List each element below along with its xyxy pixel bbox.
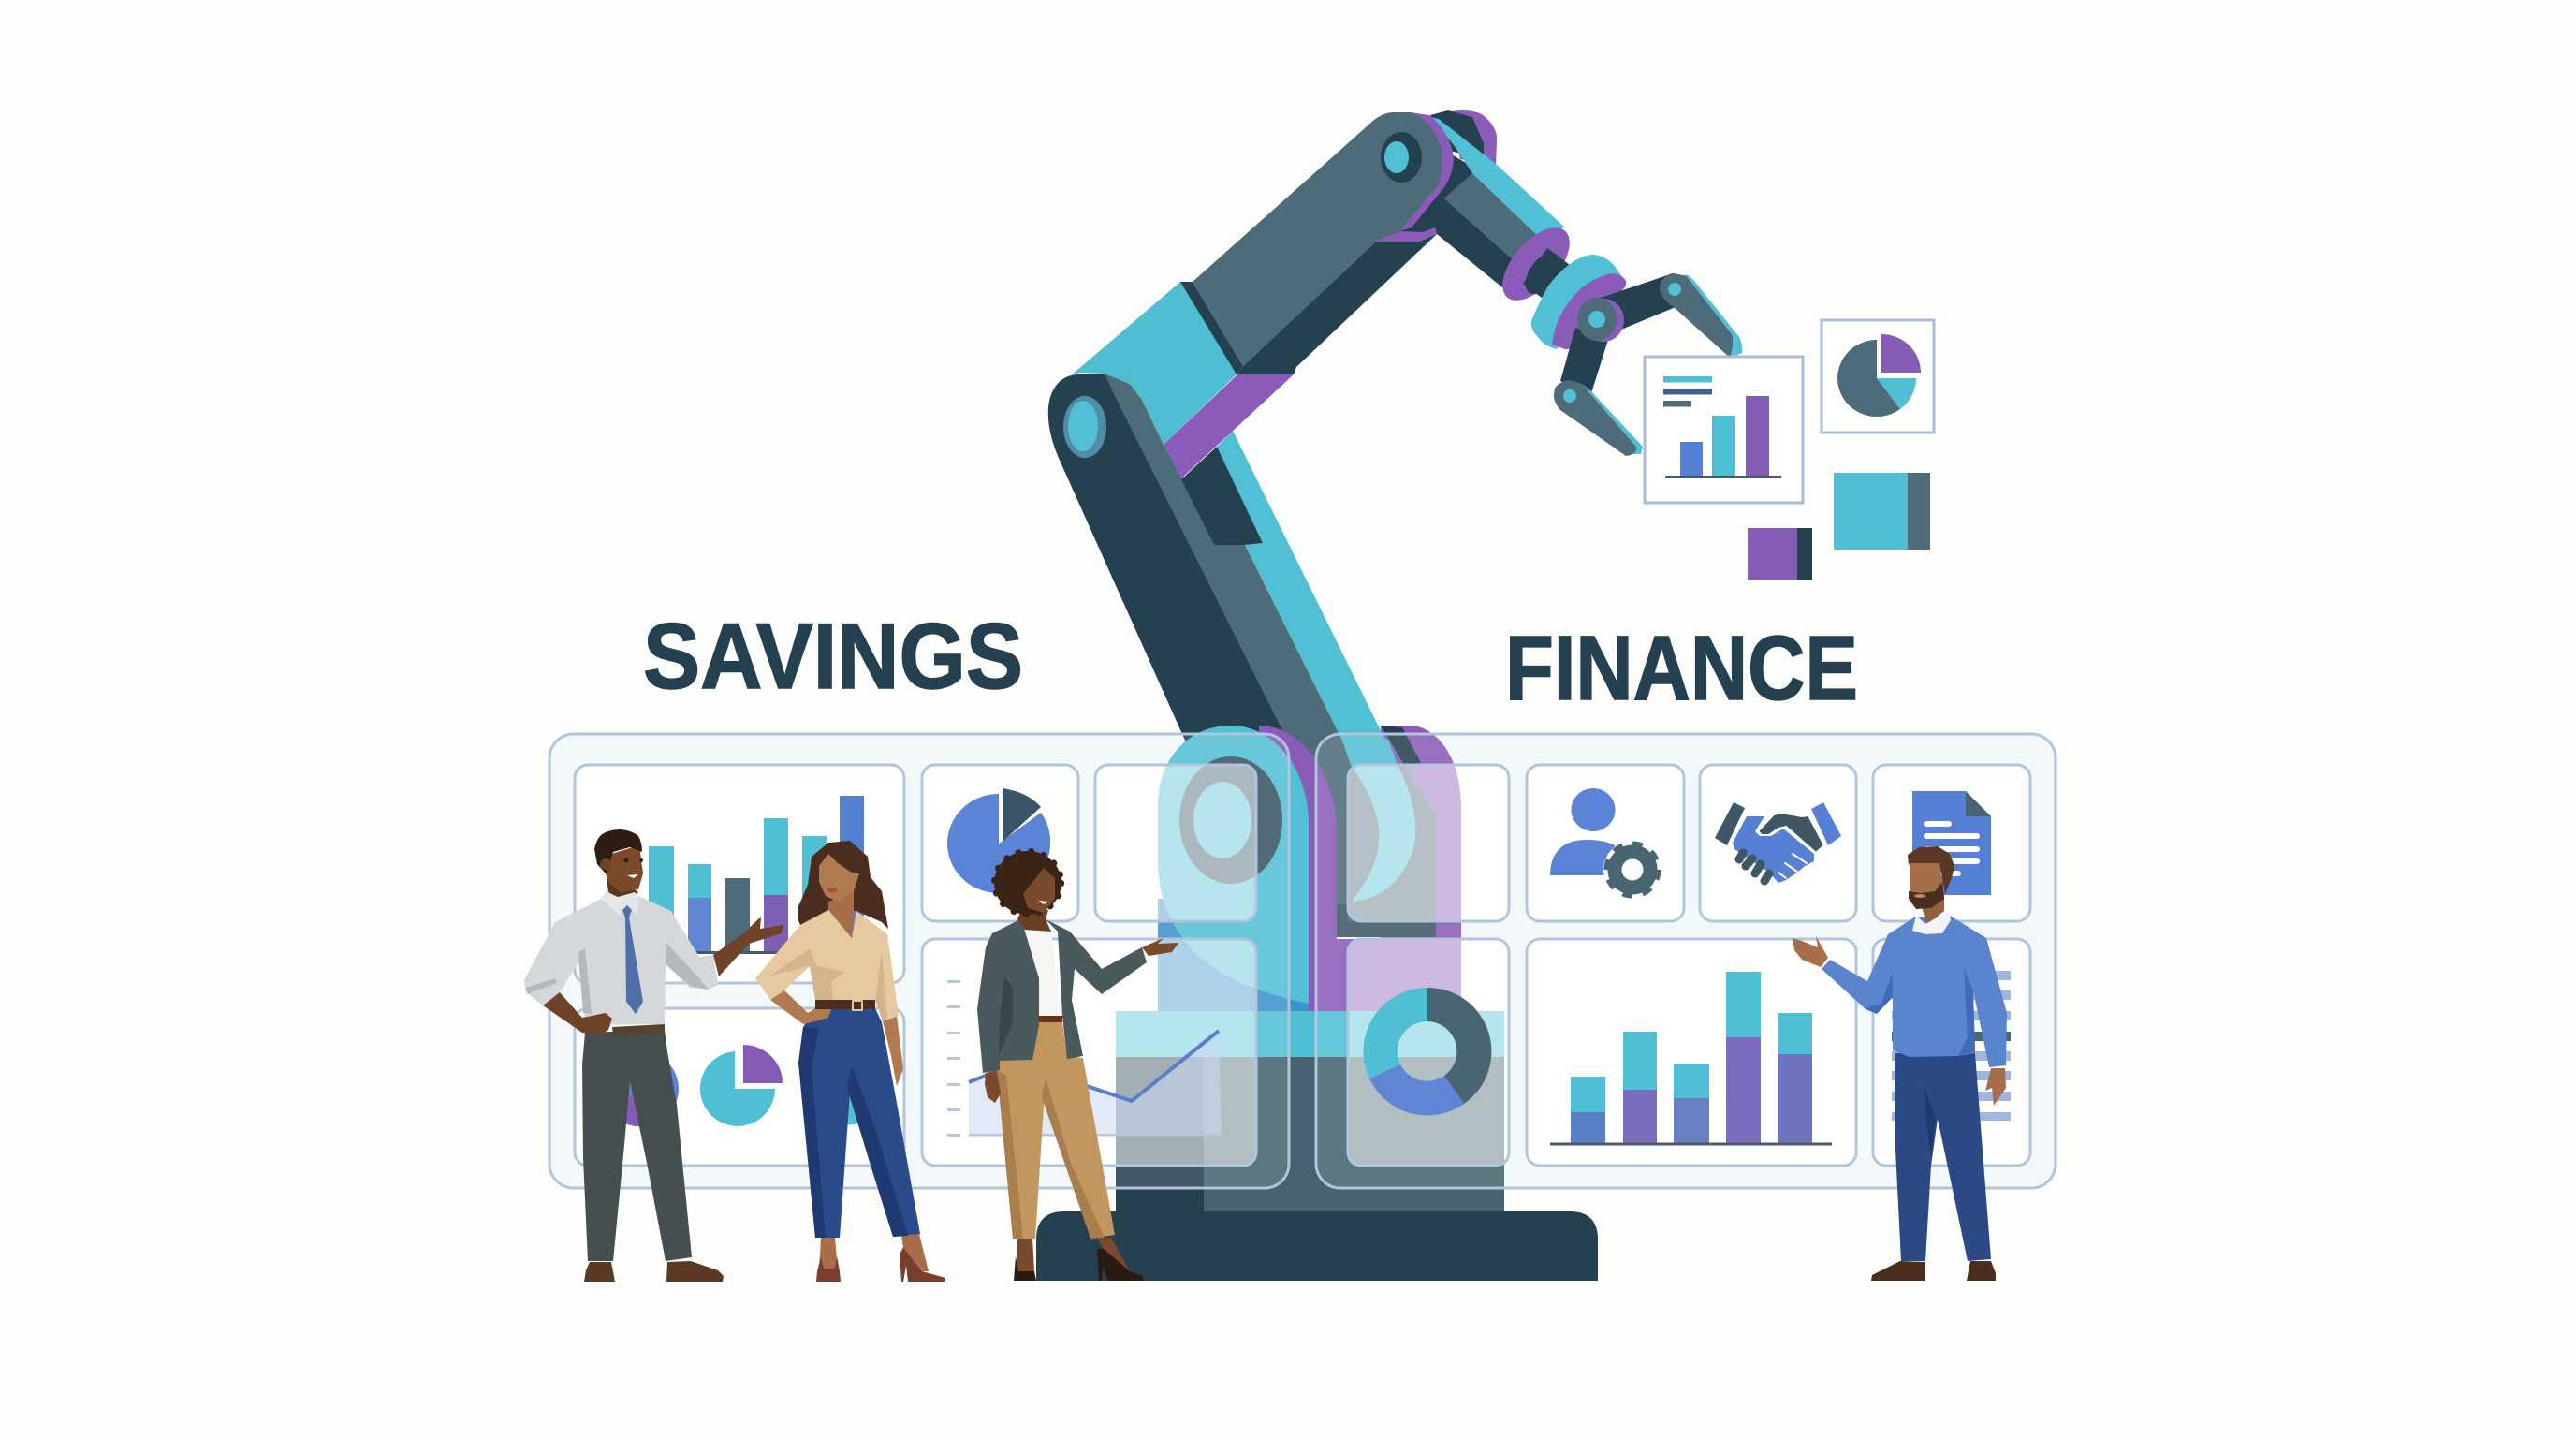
tower right purple body bbox=[1309, 726, 1461, 1011]
floating teal block bbox=[1834, 473, 1930, 550]
shoes bbox=[1871, 1261, 1996, 1281]
tower right dark wedge bbox=[1381, 726, 1421, 765]
face bbox=[1910, 863, 1942, 894]
lower arm slate strip bbox=[1105, 374, 1354, 765]
bar chart: savings bbox=[646, 796, 871, 954]
heading: savings: SAVINGS bbox=[643, 604, 1023, 708]
face bbox=[1023, 868, 1055, 913]
robot arm bbox=[1036, 110, 1742, 1281]
forearm slate bbox=[1444, 173, 1538, 260]
elbow joint bbox=[1381, 132, 1422, 183]
hand bbox=[1142, 938, 1178, 956]
panel backing: dashboard glass panels bbox=[549, 734, 2056, 1188]
forearm dark underside bbox=[1385, 140, 1514, 287]
gripper hub bbox=[1577, 298, 1624, 342]
person: man with tie bbox=[524, 829, 783, 1282]
trousers bbox=[997, 1022, 1115, 1239]
shoulder teal block bbox=[1070, 282, 1238, 445]
shoes bbox=[584, 1261, 724, 1282]
wrist purple ring bbox=[1490, 216, 1582, 312]
neck bbox=[1922, 891, 1944, 925]
heels bbox=[816, 1247, 945, 1282]
lower gripper finger bbox=[1554, 328, 1643, 456]
ankles bbox=[819, 1234, 929, 1271]
tower arm foot bbox=[1339, 730, 1415, 902]
right forearm and hand bbox=[713, 917, 783, 976]
pie chart: teal with purple wedge bbox=[700, 1045, 783, 1126]
ankles bbox=[1017, 1238, 1130, 1271]
icon: handshake bbox=[1715, 802, 1841, 883]
left forearm and hand bbox=[543, 992, 612, 1034]
shoulder purple band bbox=[1164, 374, 1294, 478]
left hand bbox=[985, 1071, 1001, 1103]
blouse bbox=[755, 910, 899, 1021]
pie chart: teal behind second presenter bbox=[842, 1086, 859, 1125]
upper arm dark side bbox=[1237, 234, 1437, 374]
forearm teal bbox=[1430, 117, 1565, 236]
hair back bbox=[798, 841, 888, 929]
shoes bbox=[1014, 1248, 1143, 1281]
eyes bbox=[623, 858, 643, 863]
sweater shadows bbox=[1865, 969, 1975, 1056]
lower arm dark box bbox=[1181, 447, 1263, 545]
blouse shadows bbox=[770, 948, 887, 1021]
tower slate L bracket bbox=[1336, 904, 1436, 937]
lower arm teal strip bbox=[1217, 431, 1398, 765]
trousers bbox=[1895, 1053, 1991, 1261]
forearm rear hub bbox=[1430, 110, 1497, 167]
donut chart bbox=[1364, 988, 1491, 1115]
lower arm dark link bbox=[1048, 374, 1301, 742]
heading: finance: FINANCE bbox=[1505, 617, 1858, 719]
right forearm bbox=[883, 1016, 903, 1086]
upper arm purple base bbox=[1376, 227, 1437, 242]
icon: document bbox=[1912, 791, 1991, 895]
shirt bbox=[524, 896, 718, 1025]
lips bbox=[827, 888, 838, 893]
trouser shadow bbox=[1924, 1084, 1936, 1159]
ear bbox=[600, 858, 611, 870]
tower slate block bbox=[1292, 730, 1436, 937]
collar bbox=[1912, 911, 1951, 934]
floating report card bbox=[1645, 357, 1803, 503]
neck bbox=[1017, 906, 1051, 932]
glass overlay on top of the robot bbox=[549, 734, 2056, 1188]
face bbox=[819, 854, 859, 902]
beard bbox=[1909, 882, 1944, 909]
person: woman in beige blouse bbox=[755, 841, 945, 1282]
blazer bbox=[977, 918, 1147, 1073]
wrist teal disc bbox=[1531, 255, 1626, 349]
smile bbox=[1038, 901, 1049, 904]
line chart bbox=[947, 980, 1222, 1137]
trouser shadows bbox=[798, 1027, 908, 1238]
tower teal lobe bbox=[1158, 726, 1309, 1004]
upper arm slate top bbox=[1193, 112, 1442, 366]
trousers bbox=[582, 1030, 692, 1261]
wrist purple crescent bbox=[1552, 273, 1626, 349]
person: woman in grey blazer bbox=[977, 851, 1178, 1281]
robot base bbox=[1036, 1211, 1598, 1281]
raised hand bbox=[1793, 936, 1828, 967]
right hand bbox=[1985, 1068, 2006, 1106]
belt bbox=[612, 1024, 665, 1035]
shoulder joint bbox=[1063, 396, 1106, 458]
wrist neck bbox=[1523, 248, 1570, 298]
upper arm purple edge bbox=[1399, 112, 1454, 231]
floating pie card bbox=[1822, 320, 1934, 433]
trouser shadows bbox=[997, 1070, 1105, 1239]
face bbox=[604, 845, 643, 892]
smile bbox=[627, 874, 638, 878]
shirt shadows bbox=[526, 943, 709, 1014]
neck bbox=[828, 891, 854, 938]
white top bbox=[1025, 930, 1061, 1016]
trousers bbox=[798, 1008, 920, 1238]
collar bbox=[601, 891, 639, 916]
blazer shadow bbox=[999, 976, 1013, 1056]
sweater bbox=[1822, 916, 2007, 1067]
person: man in blue sweater bbox=[1793, 846, 2007, 1281]
hair bbox=[594, 829, 642, 873]
pie chart: blue with wedge bbox=[947, 788, 1050, 893]
hip arm bbox=[770, 990, 831, 1024]
belt bbox=[815, 1000, 875, 1009]
upper arm slit bbox=[1180, 282, 1243, 374]
hair bbox=[1908, 846, 1954, 894]
report lines behind fourth presenter bbox=[1892, 971, 2011, 1121]
tie bbox=[622, 905, 643, 1014]
robot column bbox=[1116, 1011, 1504, 1216]
neck bbox=[606, 871, 638, 905]
stacked bar chart bbox=[1550, 972, 1832, 1146]
mouth bbox=[1914, 894, 1925, 898]
belt buckle bbox=[853, 1001, 862, 1010]
tower ring joint bbox=[1179, 756, 1282, 884]
belt bbox=[1039, 1016, 1062, 1022]
floating purple block bbox=[1748, 528, 1812, 580]
hair bbox=[994, 851, 1061, 915]
tower left purple arch bbox=[1259, 726, 1337, 1011]
tower blue underside bbox=[1158, 899, 1309, 1011]
icon: person with gear bbox=[1550, 788, 1661, 899]
pie chart: hidden behind first presenter bbox=[604, 1051, 679, 1126]
upper gripper finger bbox=[1601, 273, 1742, 358]
